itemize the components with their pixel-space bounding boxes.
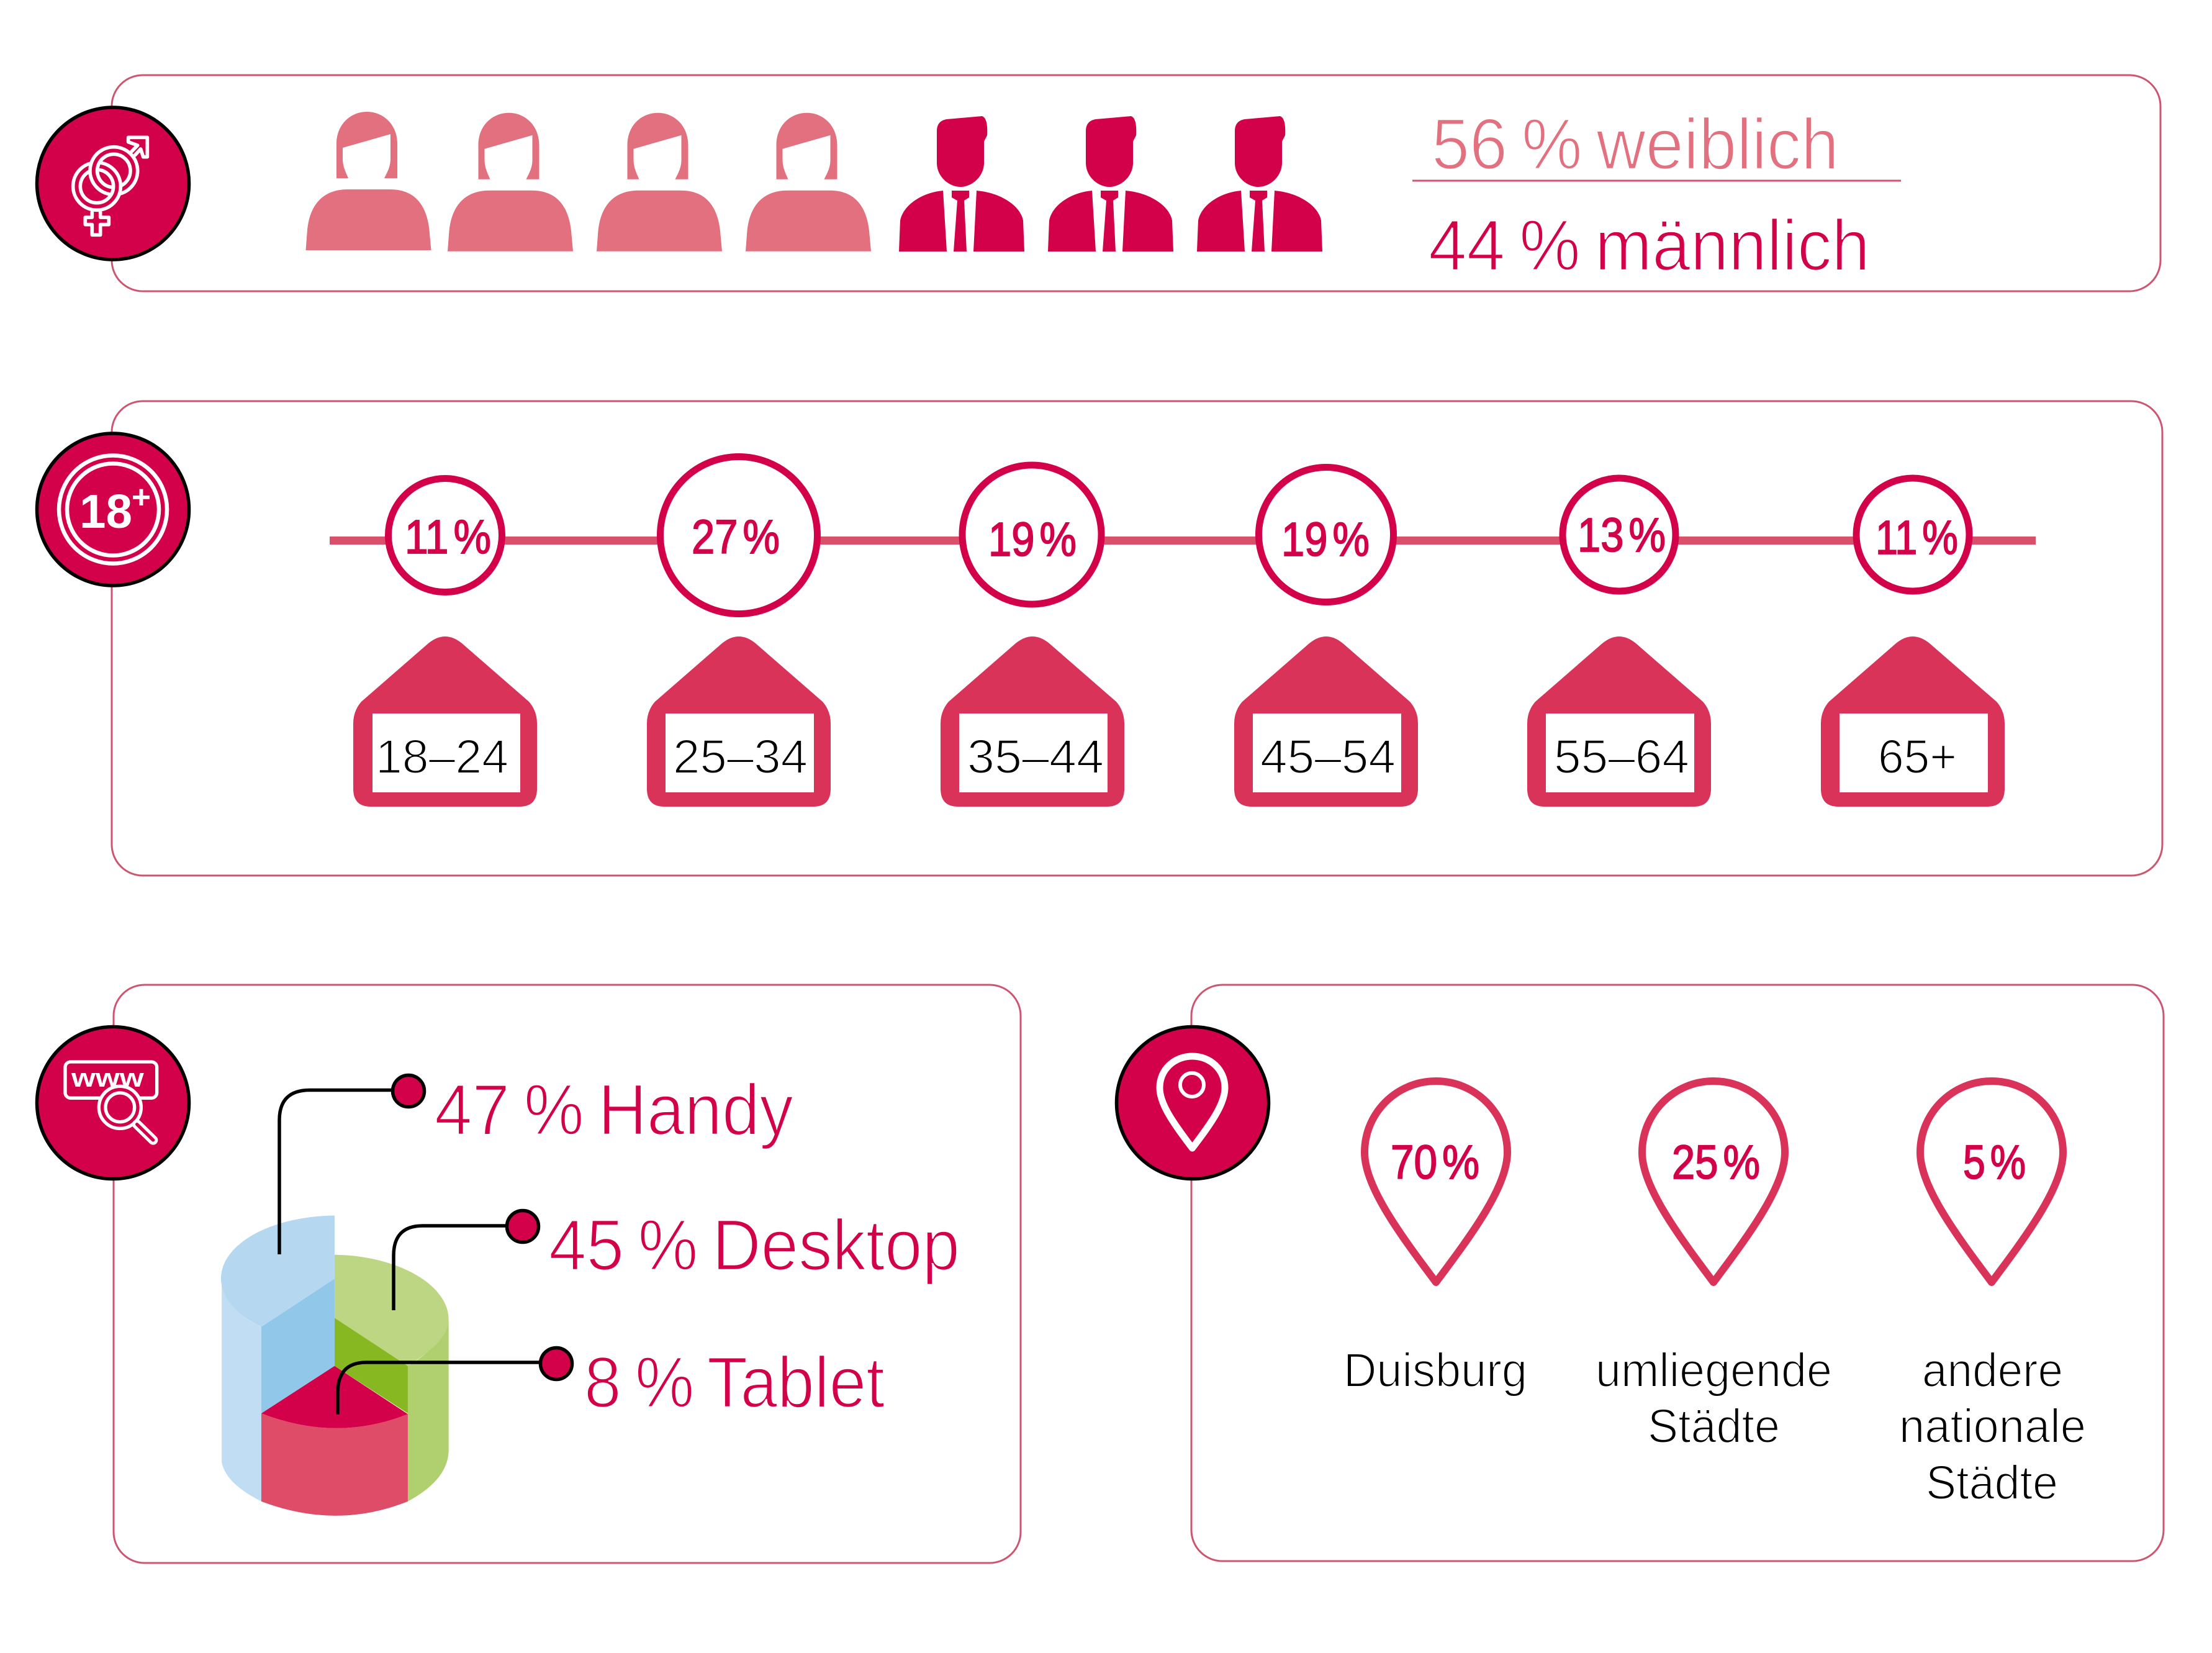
tag: 65+	[1821, 636, 2005, 807]
label: Desktop: 45 % Desktop	[549, 1205, 960, 1285]
pin: Duisburg: Duisburg	[1343, 1344, 1527, 1397]
tag: 18-24	[353, 636, 537, 807]
icon: 18+: 18	[79, 485, 132, 538]
icon: www search: www	[71, 1063, 144, 1092]
chart: 3D pie	[221, 1216, 449, 1516]
text: male share: 44 % männlich	[1429, 205, 1870, 286]
tag: 55-64	[1527, 636, 1711, 807]
panel: gender	[37, 75, 2160, 291]
circle: 55-64 share	[1563, 478, 1676, 591]
tag: 35-44: 35–44	[967, 730, 1104, 784]
age share circles	[389, 457, 1969, 614]
pin: andere nationale Städte: nationale	[1899, 1400, 2086, 1453]
figure: man 1	[899, 116, 1024, 251]
tag: 45-54	[1234, 636, 1418, 807]
label: Handy: 47 % Handy	[435, 1069, 793, 1150]
label: Tablet: 8 % Tablet	[584, 1342, 885, 1423]
circle: 65+ share: 11 %	[1876, 511, 1958, 564]
icon: 18+	[37, 433, 189, 586]
panel: age	[37, 401, 2162, 876]
pin: umliegende Städte: Städte	[1648, 1400, 1780, 1453]
circle: 25-34 share: 27 %	[692, 510, 780, 564]
figure: man 2	[1048, 116, 1173, 251]
pin: andere nationale Städte: Städte	[1926, 1456, 2058, 1510]
slice: Desktop	[335, 1255, 449, 1501]
figure: woman 1	[305, 112, 431, 250]
tag: 18-24: 18–24	[376, 730, 508, 784]
slice: Tablet	[261, 1366, 408, 1516]
circle: 35-44 share: 19 %	[988, 513, 1077, 566]
figure: man 3	[1197, 116, 1322, 251]
circle: 18-24 share: 11 %	[405, 510, 491, 564]
tag: 65+: 65+	[1878, 730, 1957, 784]
pin: umliegende Städte: 25 %	[1672, 1136, 1760, 1189]
tag: 25-34: 25–34	[673, 730, 808, 784]
leader: Desktop	[394, 1211, 539, 1310]
figure: woman 3	[597, 113, 722, 251]
pin: andere nationale Städte: 5 %	[1963, 1136, 2026, 1189]
circle: 65+ share	[1856, 478, 1969, 591]
leader: Handy	[279, 1076, 425, 1254]
icon: 18+: +	[132, 479, 151, 515]
timeline bar	[330, 537, 2036, 545]
pin: umliegende Städte: umliegende	[1596, 1344, 1832, 1397]
panel: location	[1116, 985, 2164, 1561]
pin: Duisburg: 70 %	[1391, 1136, 1479, 1189]
circle: 45-54 share	[1259, 467, 1393, 602]
panel: devices	[37, 985, 1021, 1563]
pin: umliegende Städte	[1596, 1081, 1832, 1453]
slice: Handy	[221, 1216, 335, 1501]
age group tags	[353, 636, 2005, 807]
female figures	[305, 112, 871, 251]
circle: 45-54 share: 19 %	[1281, 513, 1370, 566]
tag: 55-64: 55–64	[1554, 730, 1689, 784]
tag: 35-44	[941, 636, 1124, 807]
figure: woman 4	[746, 113, 871, 251]
text: female share: 56 % weiblich	[1432, 104, 1839, 184]
leader: Tablet	[338, 1347, 572, 1415]
circle: 18-24 share	[389, 478, 502, 592]
figure: woman 2	[448, 113, 573, 251]
pin: andere nationale Städte: andere	[1922, 1344, 2063, 1397]
circle: 35-44 share	[962, 465, 1101, 604]
tag: 45-54: 45–54	[1260, 730, 1396, 784]
tag: 25-34	[647, 636, 831, 807]
circle: 25-34 share	[661, 457, 817, 614]
pin: Duisburg	[1343, 1081, 1527, 1397]
circle: 55-64 share: 13 %	[1578, 509, 1666, 562]
icon: location pin	[1116, 1027, 1269, 1179]
icon: www search	[37, 1027, 189, 1179]
icon: gender symbols	[37, 107, 189, 260]
pin: andere nationale Städte	[1899, 1081, 2086, 1510]
male figures	[899, 116, 1322, 251]
